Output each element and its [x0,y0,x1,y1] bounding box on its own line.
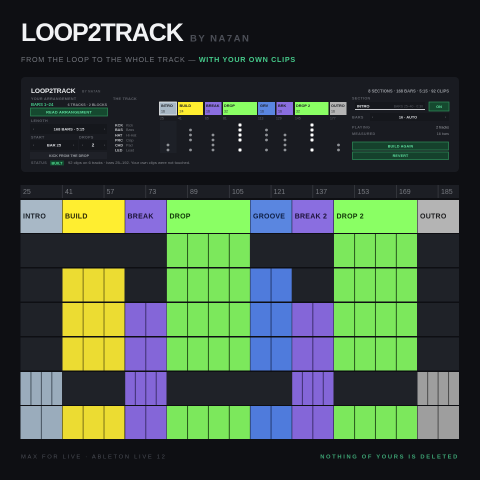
track names [115,124,136,152]
start stepper [30,140,78,150]
section: build: BUILD [65,214,88,220]
lane 5 [20,372,459,405]
section bar numbers [160,116,336,120]
section: intro [20,200,62,233]
bar ruler: 25 [23,189,31,196]
block: build: BUILD [180,104,191,108]
on button: ON [436,105,442,109]
track names: Pad [126,144,133,148]
section selector: BARS 25–40 · 0:30 [394,104,423,108]
section selector: INTRO [357,104,369,108]
section selector [355,102,425,110]
track names: PRC [115,138,123,142]
section: groove: GROOVE [253,214,285,220]
status label: STATUS [31,161,47,165]
playing stat: 2 tracks [436,126,449,130]
button: read arrangement [30,108,108,116]
arrangement bars: BARS 1–24 [31,102,54,107]
length label: LENGTH [31,119,48,123]
block: drop: DROP [224,104,235,108]
block: outro: OUTRO [331,104,345,108]
measured stat: MEASURED [352,132,376,136]
section bar numbers: 113 [258,116,264,120]
bar ruler: 105 [232,189,244,196]
track names: CHD [115,144,123,148]
track dot matrix [167,124,340,152]
bar ruler: 121 [274,189,285,196]
section: break 2 [292,200,334,233]
block: drop [223,102,257,115]
lane 6 [20,406,459,439]
bars selector: ‹ [372,116,374,120]
track names: HAT [115,134,123,138]
section bar numbers: 41 [178,116,182,120]
block: outro [330,102,346,115]
section bar numbers: 129 [276,116,282,120]
length stepper: ‹ [33,128,35,132]
bar ruler: 185 [441,189,453,196]
section bar numbers: 25 [160,116,164,120]
bar ruler: 73 [148,189,156,196]
section: outro [418,200,459,233]
block: groove: GRV [260,104,269,108]
section: intro: INTRO [23,214,46,220]
block: build [178,102,203,115]
section bar numbers: 81 [223,116,227,120]
panel byline: BY NA7AN [82,90,101,94]
section strip [160,102,346,115]
subtitle: FROM THE LOOP TO THE WHOLE TRACK — WITH YOUR OWN CLIPS [21,55,296,64]
section bar numbers: 65 [205,116,209,120]
track names: Kick [126,124,133,128]
section: drop: DROP [170,214,191,220]
block: break [205,102,222,115]
length stepper: › [104,128,106,132]
playing stat: PLAYING [352,126,370,130]
block: drop 2 [295,102,328,115]
bar ruler: 169 [399,189,411,196]
footer left: MAX FOR LIVE · ABLETON LIVE 12 [21,454,167,460]
section: groove [250,200,292,233]
on button [429,102,449,111]
status pill: BUILT [52,161,63,165]
lane 1 [20,234,459,267]
block: intro [160,102,176,115]
drops stepper: 2 [92,142,95,148]
drops stepper: › [104,144,106,148]
block: drop 2: 32 [296,110,300,114]
button: read arrangement: READ ARRANGEMENT [46,109,92,114]
track names: BAS [115,128,123,132]
block: break: 16 [206,110,210,114]
bars selector: 16 · AUTO [399,116,417,120]
start stepper: › [73,144,75,148]
panel summary: 8 SECTIONS · 168 BARS · 5:15 · 92 CLIPS [368,88,449,94]
section bar numbers: 145 [295,116,301,120]
length stepper: 168 BARS · 5:15 [54,126,85,132]
section heading: SECTION [352,96,371,100]
track names: Hi-Hat [126,134,136,138]
section: drop 2 [334,200,417,233]
lane 2 [20,268,459,302]
measured stat [352,132,449,136]
button: revert: REVERT [393,154,409,158]
selected column [160,121,176,153]
panel: device interface [21,77,459,172]
section: build [62,200,125,233]
length stepper [30,124,107,134]
playing stat [352,126,449,130]
track names: Clap [126,138,134,142]
drops label: DROPS [79,136,94,140]
bar ruler [20,185,459,198]
section: drop [167,200,250,233]
track names: Lead [126,148,134,152]
block: break 2 [276,102,293,115]
footer right: NOTHING OF YOURS IS DELETED [320,454,459,460]
block: groove [258,102,275,115]
drops stepper [79,140,107,150]
button: build again [352,142,448,150]
arrangement label: YOUR ARRANGEMENT [31,97,77,101]
block: intro: INTRO [161,104,173,108]
title: LOOP2TRACK [21,19,184,47]
drops stepper: ‹ [82,144,84,148]
track names: LED [115,148,123,152]
status message: 92 clips on 6 tracks · bars 25–192. Your own clips were not touched. [68,160,190,165]
track heading: THE TRACK [113,97,137,101]
bar ruler: 153 [358,189,369,196]
kick option [30,152,107,159]
button: build again: BUILD AGAIN [388,144,414,148]
lane 3 [20,303,459,336]
block: build: 24 [180,110,184,114]
block: drop 2: DROP 2 [296,104,310,108]
section bar numbers: 177 [330,116,336,120]
block: intro: 16 [161,110,165,114]
bar ruler: 41 [65,189,73,196]
arrangement tracks: 6 TRACKS · 2 BLOCKS [68,103,108,107]
section: drop 2: DROP 2 [336,214,364,220]
track names: KCK [115,124,123,128]
section: break: BREAK [128,214,154,220]
lane 4 [20,338,459,370]
kick option: KICK FROM THE DROP [49,154,90,158]
measured stat: 16 bars [437,132,449,136]
block: break 2: 16 [278,110,282,114]
track names: Bass [126,128,134,132]
button: revert [352,152,448,160]
block: drop: 32 [224,110,228,114]
start label: START [31,136,45,140]
bars selector [370,113,449,121]
section: outro: OUTRO [420,214,447,220]
start stepper: BAR 25 [47,142,62,148]
bar ruler: 137 [316,189,327,196]
bars selector: › [445,116,447,120]
status pill [50,160,64,166]
block: break 2: BRK [278,104,286,108]
byline: BY NA7AN [190,34,250,44]
panel title: LOOP2TRACK [31,88,76,95]
bar ruler: 57 [106,189,114,196]
block: outro: 16 [331,110,335,114]
start stepper: ‹ [33,144,35,148]
arrangement section headers [20,200,459,233]
section: break [125,200,166,233]
block: groove: 16 [260,110,264,114]
bar ruler: 89 [190,189,198,196]
bars label: BARS [352,116,364,120]
block: break: BREAK [206,104,220,108]
section: break 2: BREAK 2 [295,214,327,220]
